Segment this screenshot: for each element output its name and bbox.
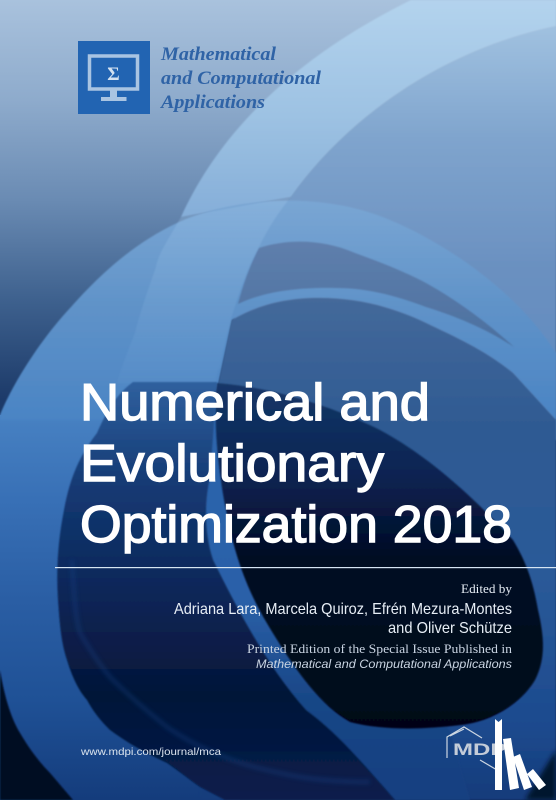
- editors: and Oliver Schütze: [388, 620, 512, 637]
- upper ribbon: [181, 0, 556, 217]
- journal name: and Computational: [161, 68, 322, 89]
- printed edition note: Mathematical and Computational Applications: [256, 659, 512, 671]
- title: [80, 374, 512, 554]
- title: Evolutionary: [80, 435, 384, 493]
- editors: Adriana Lara, Marcela Quiroz, Efrén Mezura-Montes: [174, 601, 512, 618]
- wide ring ribbon: [0, 201, 556, 420]
- bottom-left dark corner: [0, 670, 73, 800]
- hexagon outline: [447, 727, 497, 770]
- journal name: [160, 44, 322, 113]
- navy inner shape: [57, 382, 395, 800]
- logo square: [78, 41, 150, 114]
- editors: Edited by: [461, 582, 513, 596]
- large pale disc behind the ribbons: [220, 26, 556, 440]
- lower left blue field: [0, 415, 240, 800]
- blue sweep beside the dark centre: [206, 395, 470, 800]
- MDPI wordmark: MDPI: [453, 741, 513, 759]
- icon: monitor with sigma: Σ: [107, 64, 120, 85]
- thin highlight curve in navy: [72, 560, 370, 782]
- icon: monitor with sigma: [90, 56, 138, 101]
- title: Numerical and: [80, 374, 430, 432]
- right inner field: [200, 298, 556, 800]
- bottom-right dark corner: [525, 750, 556, 800]
- printed edition note: [247, 642, 513, 671]
- journal name: Mathematical: [160, 44, 277, 65]
- icon: white book bars: [495, 719, 546, 790]
- journal url: www.mdpi.com/journal/mca: [80, 746, 221, 758]
- printed edition note: Printed Edition of the Special Issue Published in: [247, 642, 513, 656]
- journal name: Applications: [160, 92, 265, 113]
- editors: [174, 582, 513, 637]
- title: Optimization 2018: [80, 496, 512, 554]
- wedge between ring and third ribbon: [238, 242, 514, 347]
- journal logo: [78, 41, 322, 114]
- lower fade of the upper ribbon: [117, 197, 291, 385]
- darkest central shape: [216, 383, 543, 728]
- MDPI logo: [447, 719, 546, 790]
- title rule: [55, 567, 556, 568]
